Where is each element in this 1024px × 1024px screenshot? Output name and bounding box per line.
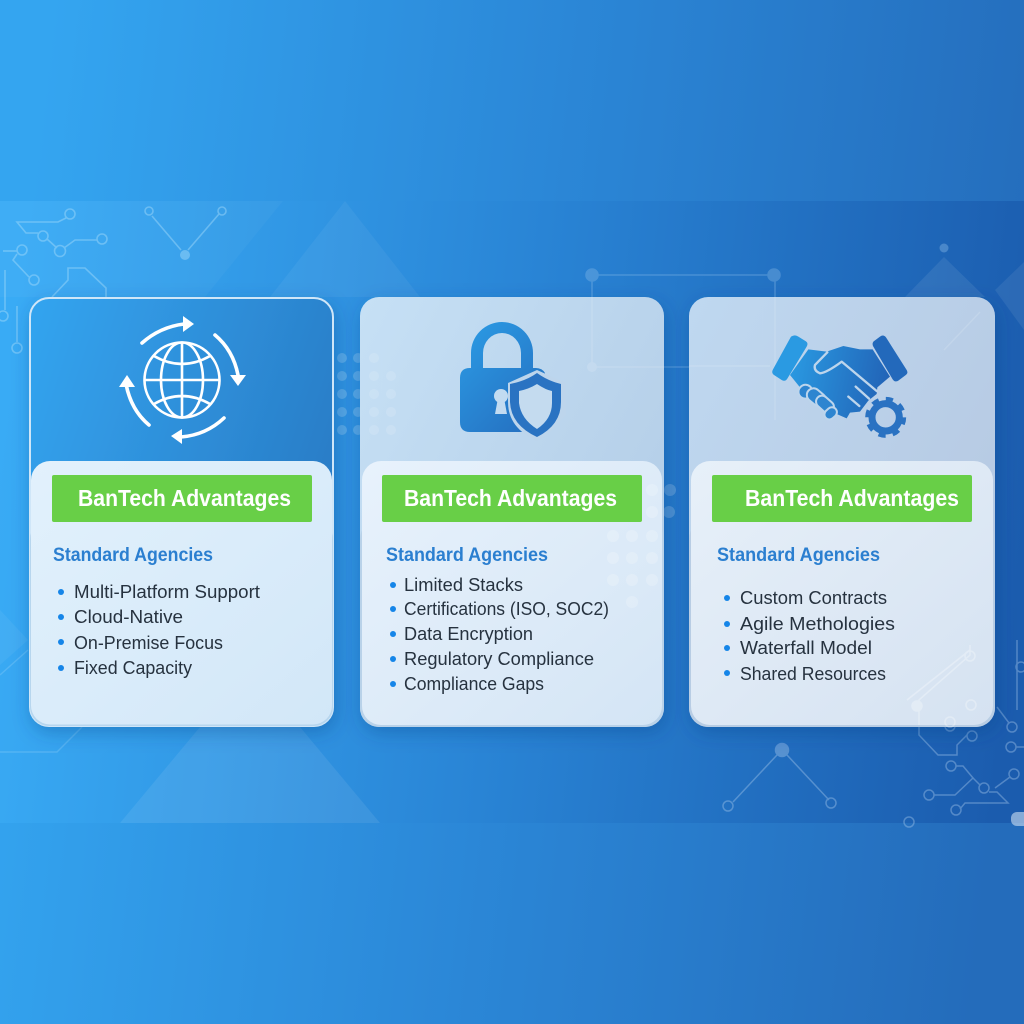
background band [0, 201, 1024, 823]
list [58, 582, 260, 678]
faint circuit over lower panel [907, 645, 976, 727]
list: Fixed Capacity [74, 658, 192, 678]
list: Agile Methologies [740, 614, 895, 634]
list: On-Premise Focus [74, 633, 223, 653]
subheading: Standard Agencies [53, 545, 213, 566]
faint lines over card 3 [689, 297, 980, 420]
list: Certifications (ISO, SOC2) [404, 599, 609, 619]
lower panel rim [360, 520, 664, 727]
icon: padlock with shield [460, 322, 566, 441]
list: Regulatory Compliance [404, 649, 594, 669]
list: Shared Resources [740, 664, 886, 684]
circuit lines top right [586, 269, 780, 367]
subheading: Standard Agencies [717, 545, 880, 566]
icon: rotating globe [119, 316, 246, 444]
circuit node top right [940, 244, 948, 252]
list [724, 588, 895, 684]
circuit lines bottom right [723, 707, 1024, 827]
list: Waterfall Model [740, 638, 872, 658]
lower panel [31, 461, 332, 724]
lower panel [362, 461, 662, 725]
circuit node top left [180, 250, 190, 260]
heading badge: BanTech Advantages [404, 485, 617, 511]
list: Cloud-Native [74, 607, 183, 627]
circuit lines bottom left [0, 650, 82, 752]
heading badge: BanTech Advantages [745, 485, 959, 511]
heading badge [382, 475, 642, 522]
lower panel rim [30, 520, 333, 726]
heading badge [712, 475, 972, 522]
right edge circuit line [1016, 640, 1024, 710]
list: Custom Contracts [740, 588, 887, 608]
faint lines and dots over card 2 [369, 297, 664, 435]
subheading: Standard Agencies [386, 545, 548, 566]
lower panel [691, 461, 993, 725]
panel: card 2 [360, 297, 664, 727]
panel: card 3 [689, 297, 995, 727]
lower panel rim [689, 520, 995, 727]
panel: card 1 [30, 298, 333, 726]
icon: handshake with gear [772, 335, 907, 435]
heading badge [52, 475, 312, 522]
list: Multi-Platform Support [74, 582, 260, 602]
circuit lines top left [0, 207, 226, 353]
decorative corner blob [1011, 812, 1024, 826]
list: Limited Stacks [404, 575, 523, 595]
dot pattern [337, 353, 676, 518]
list: Compliance Gaps [404, 674, 544, 694]
dot pattern inside panel [607, 484, 658, 608]
heading badge: BanTech Advantages [78, 485, 291, 511]
list [390, 575, 609, 694]
list: Data Encryption [404, 624, 533, 644]
